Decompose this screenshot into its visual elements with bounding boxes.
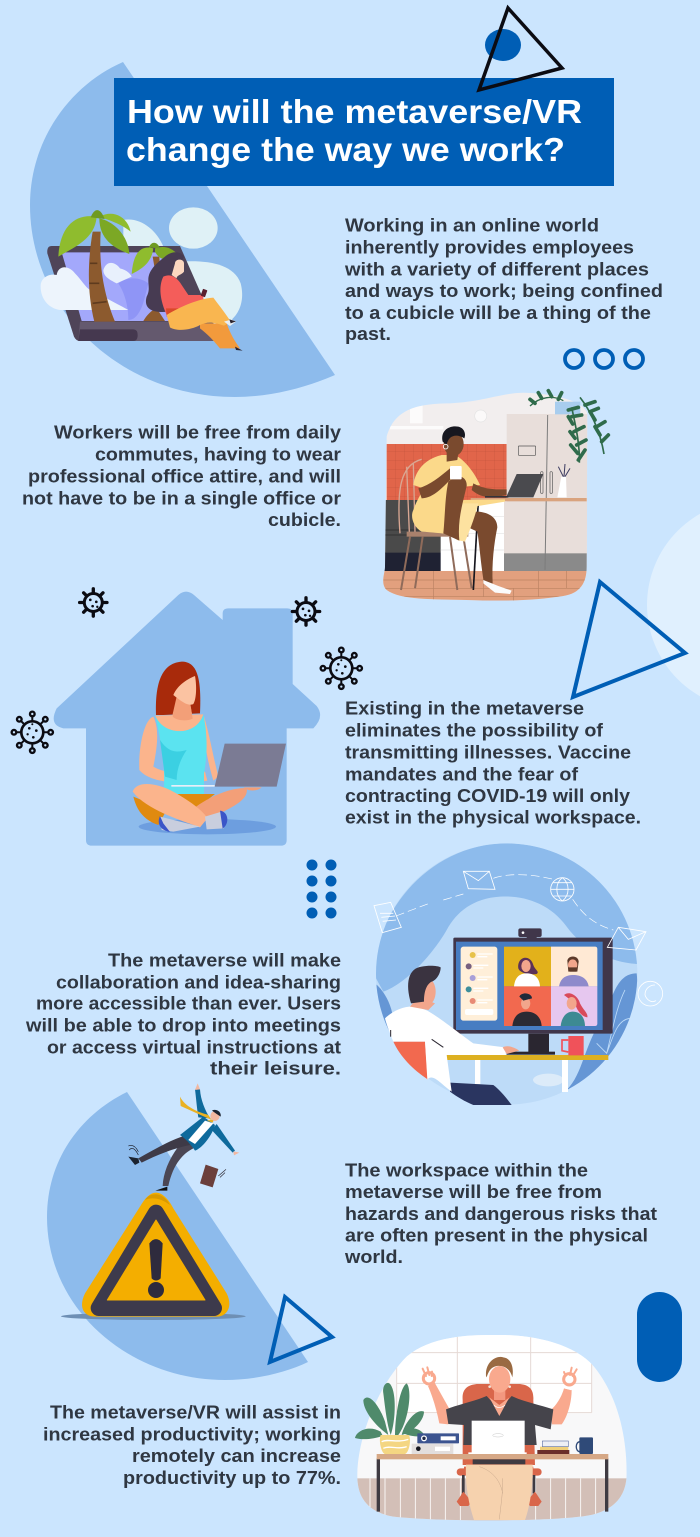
text block: working in an online world: past. — [345, 324, 391, 344]
blue dot on top triangle — [485, 29, 521, 61]
text block: increased productivity: The metaverse/VR will assist in — [50, 1402, 341, 1422]
top pie segment background — [30, 62, 335, 397]
text block: increased productivity — [43, 1402, 341, 1488]
black outline triangle — [479, 8, 562, 90]
text block: collaboration and idea sharing — [25, 950, 341, 1078]
text block: working in an online world — [344, 216, 663, 344]
title banner: change the way we work? — [126, 131, 565, 168]
text block: workspace free from hazards: are often present in the physical — [345, 1226, 648, 1246]
blue outline triangle lower — [270, 1297, 332, 1362]
title banner — [114, 78, 614, 186]
text block: workspace free from hazards: hazards and dangerous risks that — [345, 1204, 657, 1224]
text block: workspace free from hazards — [344, 1160, 657, 1267]
text block: workers free from commutes — [22, 422, 341, 530]
text block: eliminates illness transmission: eliminates the possibility of — [345, 720, 604, 740]
dot grid decoration — [306, 860, 336, 918]
icon: virus small top right — [292, 598, 320, 625]
text block: collaboration and idea sharing: collaboration and idea-sharing — [56, 972, 341, 992]
text block: collaboration and idea sharing: or access virtual instructions at — [47, 1038, 341, 1058]
blue outline triangle — [573, 582, 685, 697]
text block: workers free from commutes: professional office attire, and will — [28, 466, 341, 486]
text block: workers free from commutes: Workers will be free from daily — [54, 422, 341, 442]
decorative pale circle at right edge — [647, 500, 700, 710]
text block: collaboration and idea sharing: more accessible than ever. Users — [36, 994, 341, 1014]
text block: collaboration and idea sharing: The metaverse will make — [108, 950, 341, 970]
illustration: man slipping on warning sign — [61, 1083, 246, 1320]
text block: eliminates illness transmission: contracting COVID-19 will only — [345, 786, 630, 806]
text block: working in an online world: to a cubicle will be a thing of the — [345, 303, 651, 323]
blue pill decoration — [637, 1292, 682, 1382]
text block: eliminates illness transmission: mandates and the fear of — [345, 764, 579, 784]
text block: working in an online world: inherently provides employees — [345, 238, 634, 258]
text block: collaboration and idea sharing: their leisure. — [210, 1058, 341, 1078]
lower pie segment background — [47, 1092, 308, 1380]
illustration: woman in kitchen with laptop — [380, 390, 608, 607]
title banner: How will the metaverse/VR — [127, 93, 582, 130]
text block: workers free from commutes: not have to be in a single office or — [22, 488, 341, 508]
text block: collaboration and idea sharing: will be able to drop into meetings — [25, 1016, 341, 1036]
text block: working in an online world: and ways to work; being confined — [345, 281, 663, 301]
text block: eliminates illness transmission — [345, 698, 641, 828]
icon: virus right of house — [321, 648, 362, 689]
illustration: woman on laptop with palm trees — [41, 207, 243, 351]
text block: workers free from commutes: cubicle. — [268, 510, 341, 530]
text block: eliminates illness transmission: exist in the physical workspace. — [345, 808, 641, 828]
text block: working in an online world: Working in an online world — [345, 216, 599, 236]
illustration: video call on monitor — [373, 840, 663, 1107]
text block: increased productivity: productivity up to 77%. — [123, 1468, 341, 1488]
three rings decoration — [565, 350, 643, 368]
icon: virus left of house — [12, 712, 53, 753]
text block: increased productivity: remotely can increase — [132, 1446, 341, 1466]
text block: workspace free from hazards: world. — [344, 1247, 403, 1267]
text block: eliminates illness transmission: transmitting illnesses. Vaccine — [345, 742, 631, 762]
text block: working in an online world: with a variety of different places — [344, 260, 649, 280]
illustration: house with woman working on laptop — [54, 592, 320, 846]
text block: workspace free from hazards: metaverse will be free from — [345, 1182, 602, 1202]
text block: workers free from commutes: commutes, having to wear — [95, 444, 341, 464]
text block: eliminates illness transmission: Existing in the metaverse — [345, 698, 584, 718]
icon: virus small top left — [80, 589, 107, 616]
text block: workspace free from hazards: The workspace within the — [345, 1160, 588, 1180]
text block: increased productivity: increased productivity; working — [43, 1424, 341, 1444]
illustration: woman meditating at desk — [353, 1330, 630, 1523]
